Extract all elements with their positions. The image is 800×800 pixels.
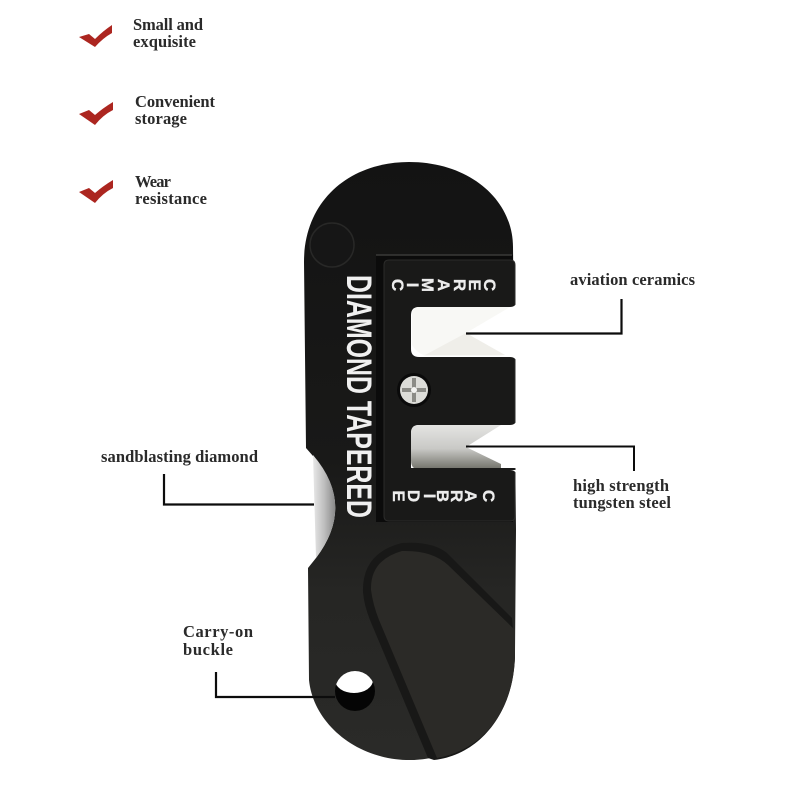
- dome circle mark: [310, 223, 354, 267]
- label: aviation ceramics: [570, 270, 696, 289]
- check icon: [79, 180, 113, 203]
- plate text: CERAMIC: I: [403, 283, 422, 287]
- plate text: CERAMIC: E: [465, 279, 484, 291]
- check icon: [79, 25, 112, 47]
- metal plate: [384, 260, 515, 521]
- recess channel: [376, 255, 513, 522]
- label: high strength: [573, 476, 669, 495]
- label: sandblasting diamond: [101, 447, 258, 466]
- callout: high strength tungsten steel: [466, 446, 671, 512]
- feature: wear resistance: [79, 172, 207, 208]
- feature: small and exquisite: [79, 15, 203, 51]
- label: buckle: [183, 640, 233, 659]
- check icon: [79, 102, 113, 125]
- label: resistance: [135, 189, 207, 208]
- plate text: CARBIDE: R: [447, 490, 466, 502]
- leader line: [466, 299, 622, 334]
- plate text: CERAMIC: C: [480, 279, 499, 291]
- lanyard hole: [335, 667, 375, 711]
- label: Carry-on: [183, 622, 253, 641]
- fixing screw: [397, 373, 431, 407]
- plate text: CARBIDE: B: [433, 490, 452, 502]
- plate text: CERAMIC: C: [388, 279, 407, 291]
- label: exquisite: [133, 32, 196, 51]
- feature: convenient storage: [79, 92, 216, 128]
- callout: carry-on buckle: [183, 622, 335, 697]
- plate text: CARBIDE: E: [389, 490, 408, 502]
- plate text: CARBIDE: D: [404, 490, 423, 502]
- product: pocket sharpener: [304, 162, 520, 760]
- plate text: CARBIDE: [389, 490, 498, 502]
- silver sandblasted diamond blade: [313, 455, 335, 558]
- plate text: CERAMIC: A: [434, 279, 453, 291]
- label: Wear: [135, 172, 171, 191]
- leader line: [466, 446, 634, 471]
- side text: DIAMOND TAPERED: DIAMOND TAPERED: [339, 275, 378, 518]
- sharpener body: [304, 162, 516, 760]
- raised bottom panel: [363, 543, 515, 760]
- label: Small and: [133, 15, 203, 34]
- plate text: CARBIDE: I: [420, 494, 439, 498]
- plate text: CERAMIC: M: [418, 278, 437, 292]
- plate text: CARBIDE: A: [461, 490, 480, 502]
- label: Convenient: [135, 92, 216, 111]
- carbide slot: [411, 419, 520, 476]
- leader line: [216, 672, 335, 697]
- label: tungsten steel: [573, 493, 671, 512]
- callout: aviation ceramics: [466, 270, 696, 334]
- ceramic slot: [411, 301, 520, 363]
- leader line: [164, 474, 314, 504]
- label: storage: [135, 109, 187, 128]
- callout: sandblasting diamond: [101, 447, 314, 504]
- plate text: CARBIDE: C: [479, 490, 498, 502]
- plate text: CERAMIC: [388, 278, 499, 292]
- top edge highlight: [376, 254, 512, 256]
- plate text: CERAMIC: R: [450, 279, 469, 291]
